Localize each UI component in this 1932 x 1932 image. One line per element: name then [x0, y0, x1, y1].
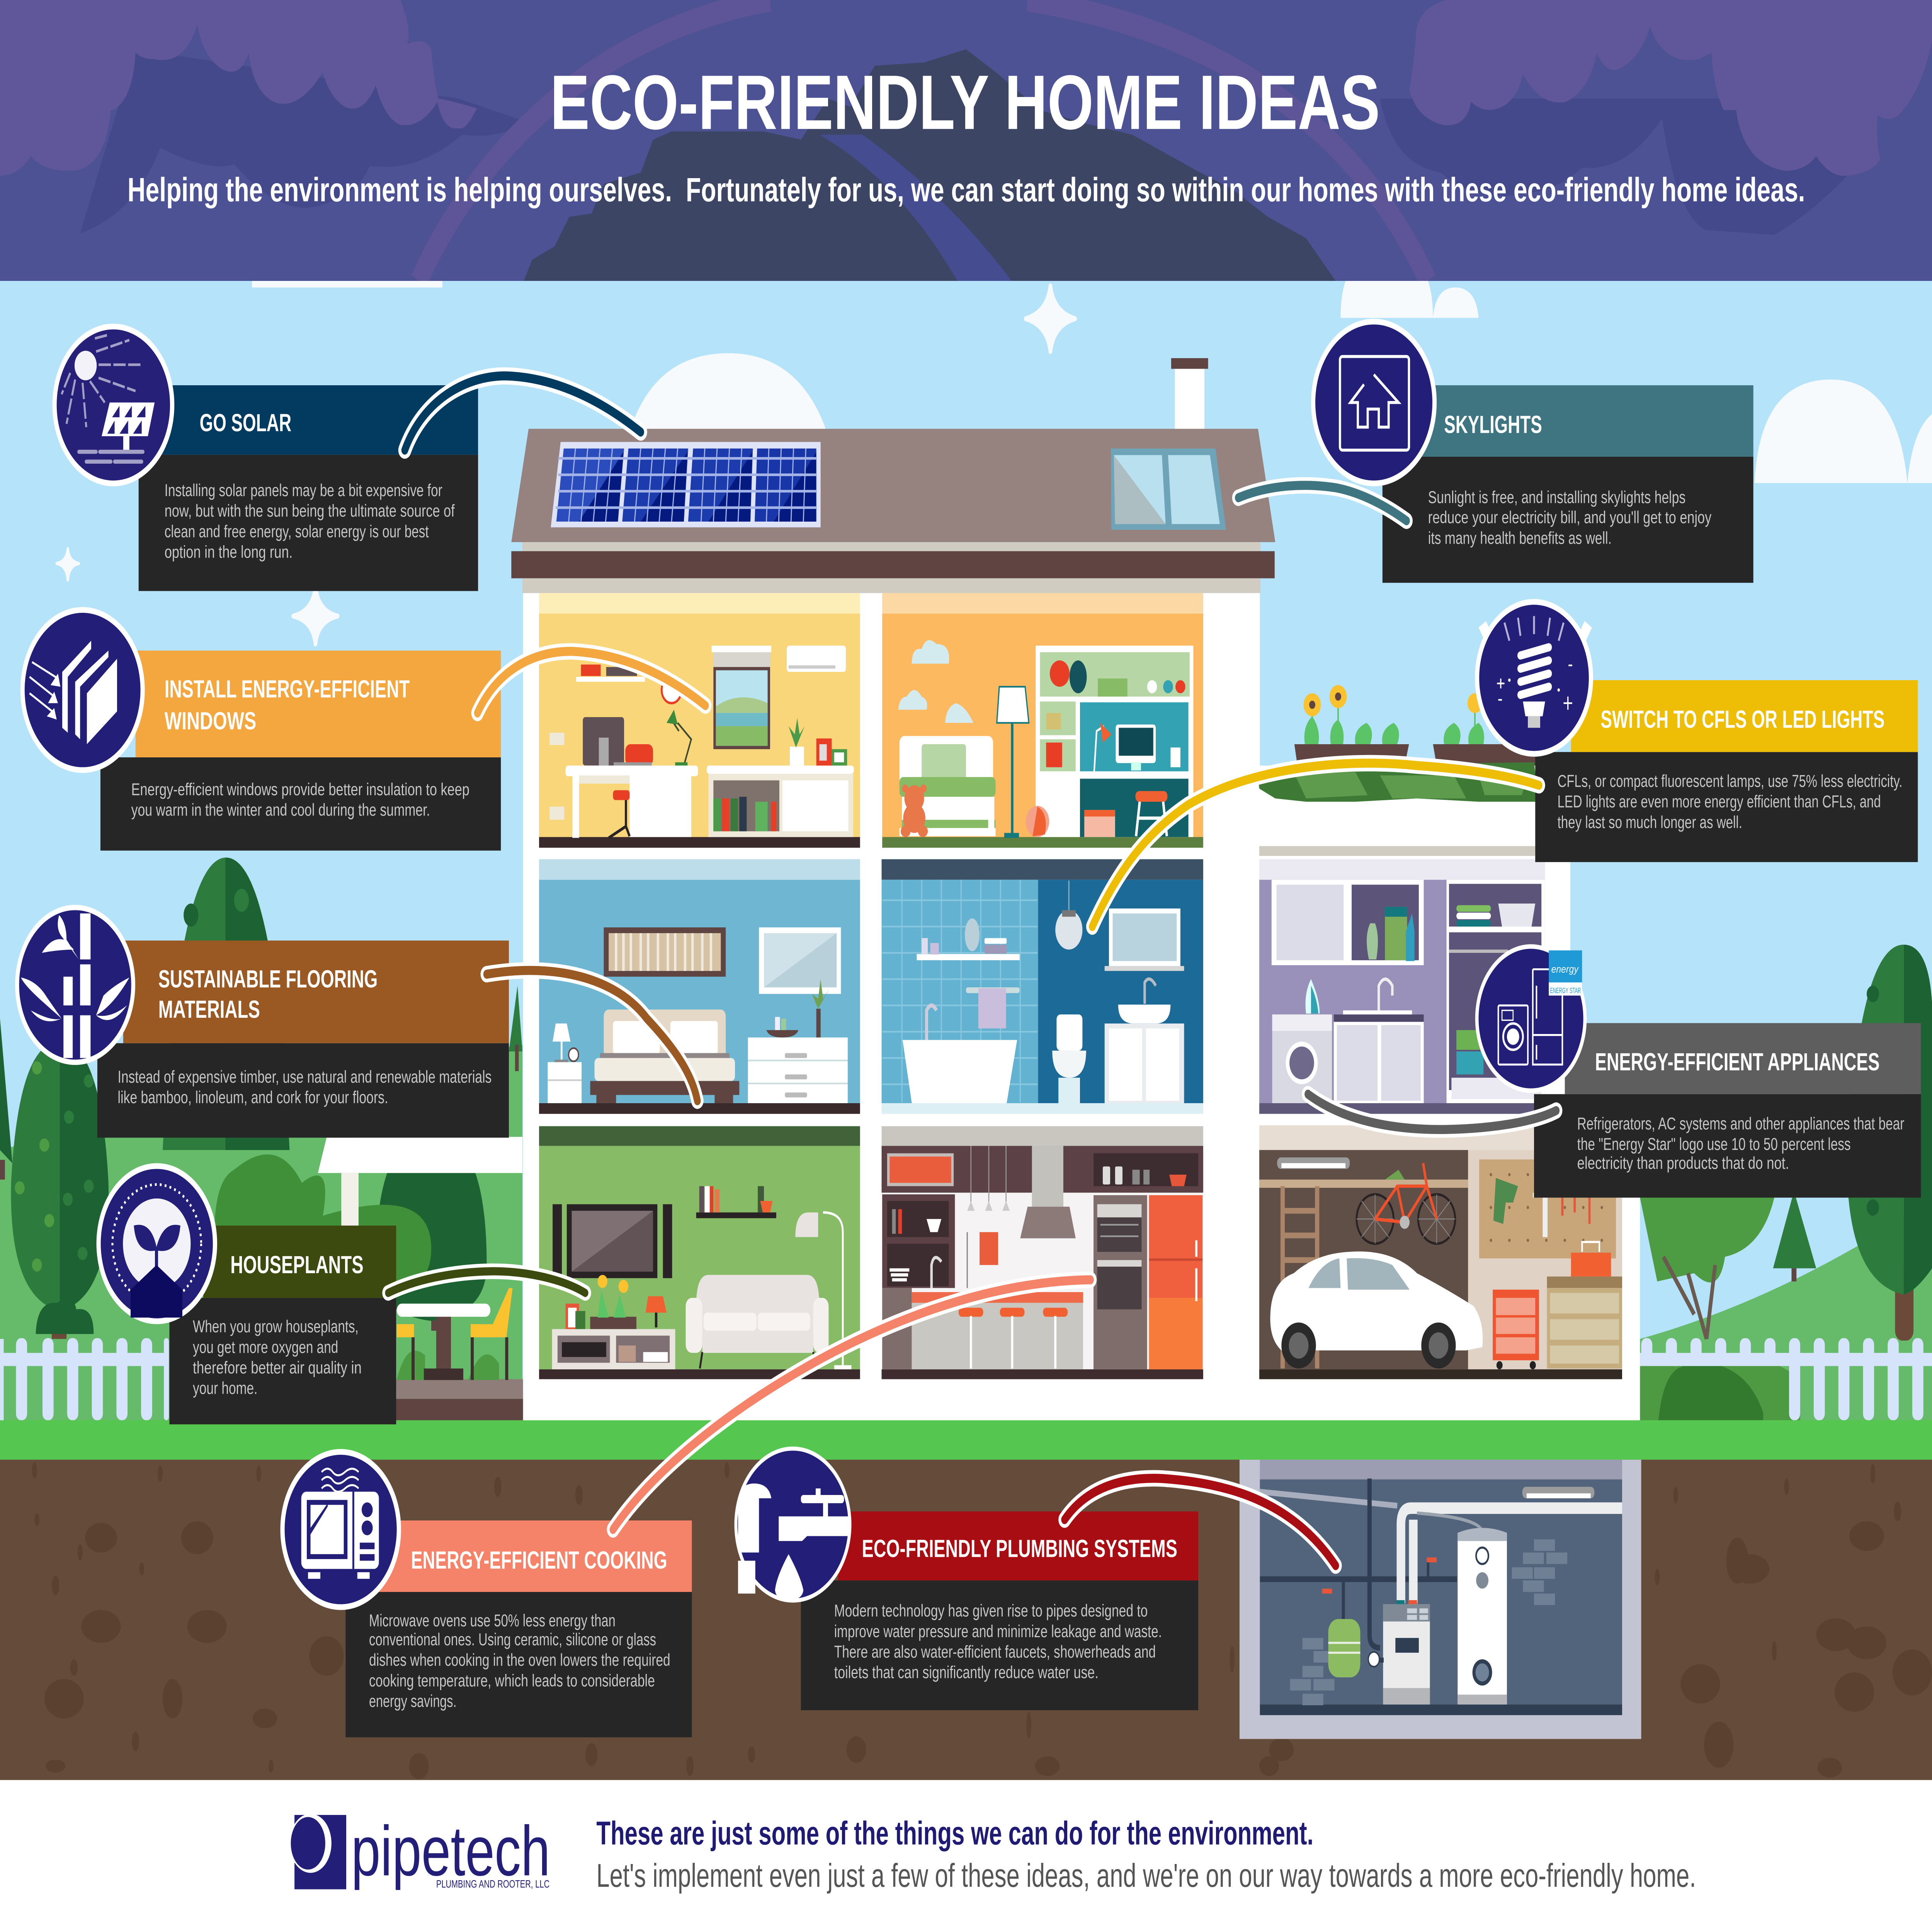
icon: cfl bulb: [1475, 599, 1593, 757]
heading: flooring: [158, 965, 378, 1023]
footer statement: These are just some of the things we can do for the environment.: [596, 1815, 1313, 1852]
arrow: appliances connector: [1308, 1094, 1556, 1129]
arrow: flooring connector: [487, 970, 697, 1101]
arrow: cooking connector: [613, 1280, 1090, 1529]
panel: energy-efficient windows: [20, 607, 501, 850]
heading: plumbing: ECO-FRIENDLY PLUMBING SYSTEMS: [862, 1535, 1177, 1562]
body: windows: you warm in the winter and cool during the summer.: [131, 801, 430, 820]
body: skylights: reduce your electricity bill, and you'll get to enjoy: [1428, 509, 1712, 527]
body: houseplants: your home.: [193, 1379, 257, 1398]
body: cooking: [369, 1612, 670, 1711]
room: bedroom: [539, 859, 860, 1114]
left landscape: [0, 857, 524, 1421]
subtitle: Helping the environment is helping ourselves. Fortunately for us, we can start doing so within our homes with these eco-friendly home ideas.: [128, 171, 1805, 209]
body: cooking: cooking temperature, which leads to considerable: [369, 1672, 655, 1690]
heading: flooring: SUSTAINABLE FLOORING: [158, 965, 378, 993]
heading: skylights: SKYLIGHTS: [1444, 411, 1542, 438]
panel: cfl or led lights: [1475, 599, 1918, 862]
icon: washer and fridge: energy: [1551, 964, 1579, 975]
body: cooking: conventional ones. Using ceramic, silicone or glass: [369, 1631, 656, 1649]
header banner: [0, 0, 1932, 281]
body: houseplants: [193, 1318, 362, 1398]
basement: [1240, 1460, 1641, 1739]
room: laundry: [1259, 859, 1545, 1114]
body: houseplants: When you grow houseplants,: [193, 1318, 359, 1336]
panel: skylights: [1311, 319, 1753, 583]
body: skylights: Sunlight is free, and installing skylights helps: [1428, 488, 1685, 507]
body: go solar: now, but with the sun being the ultimate source of: [165, 502, 455, 520]
body: go solar: clean and free energy, solar energy is our best: [165, 522, 429, 541]
body: houseplants: therefore better air quality in: [193, 1359, 362, 1378]
arrow: solar connector: [405, 376, 641, 450]
body: appliances: the "Energy Star" logo use 10 to 50 percent less: [1577, 1135, 1851, 1154]
heading: appliances: ENERGY-EFFICIENT APPLIANCES: [1595, 1048, 1879, 1076]
heading: windows: WINDOWS: [165, 707, 256, 735]
heading: go solar: GO SOLAR: [200, 409, 291, 437]
heading: windows: INSTALL ENERGY-EFFICIENT: [165, 675, 410, 702]
solar panels: [551, 442, 821, 527]
house body: [523, 593, 1640, 1420]
body: plumbing: Modern technology has given rise to pipes designed to: [834, 1602, 1148, 1621]
panel: sustainable flooring: [15, 905, 509, 1138]
room: study: [539, 593, 860, 848]
footer statement: [596, 1815, 1696, 1894]
icon: faucet and pipes: [735, 1447, 851, 1603]
body: windows: Energy-efficient windows provide better insulation to keep: [131, 780, 469, 799]
heading: houseplants: HOUSEPLANTS: [230, 1251, 364, 1279]
room: bathroom: [882, 859, 1203, 1114]
icon: seedling: [97, 1163, 217, 1324]
panel: plumbing systems: [735, 1447, 1198, 1710]
room: kids bedroom: [882, 593, 1203, 848]
body: cooking: Microwave ovens use 50% less energy than: [369, 1612, 616, 1630]
title: ECO-FRIENDLY HOME IDEAS: [550, 60, 1380, 146]
clouds and stars: [57, 281, 1932, 644]
body: flooring: [118, 1068, 492, 1107]
panel: houseplants: [97, 1163, 396, 1424]
roof: [511, 429, 1275, 593]
panel: energy-efficient appliances: [1475, 938, 1921, 1197]
heading: cfl: SWITCH TO CFLS OR LED LIGHTS: [1600, 706, 1884, 733]
body: cfl: [1558, 772, 1902, 832]
heading: flooring: MATERIALS: [158, 995, 260, 1023]
arrow: windows connector: [478, 651, 706, 713]
rooftop garden: [1258, 685, 1540, 802]
body: go solar: option in the long run.: [165, 543, 293, 562]
body: appliances: Refrigerators, AC systems and other appliances that bear: [1577, 1115, 1904, 1133]
footer statement: Let's implement even just a few of these ideas, and we're on our way towards a more eco-friendly home.: [596, 1857, 1696, 1894]
heading: windows: [165, 675, 410, 735]
heading: cooking: ENERGY-EFFICIENT COOKING: [411, 1546, 667, 1574]
arrow: houseplants connector: [388, 1271, 585, 1293]
body: go solar: Installing solar panels may be a bit expensive for: [165, 481, 442, 500]
body: plumbing: improve water pressure and minimize leakage and waste.: [834, 1622, 1162, 1641]
arrow: cfl connector: [1092, 763, 1539, 927]
fence left: [0, 1338, 169, 1421]
ground: grass and soil: [0, 1420, 1932, 1780]
body: skylights: [1428, 488, 1712, 548]
logo: pipetech: PLUMBING AND ROOTER, LLC: [436, 1878, 549, 1890]
body: cooking: energy savings.: [369, 1692, 456, 1711]
icon: washer and fridge: ENERGY STAR: [1550, 986, 1581, 995]
icon: bamboo: [15, 905, 135, 1065]
body: windows: [131, 780, 469, 820]
body: cooking: dishes when cooking in the oven lowers the required: [369, 1651, 670, 1670]
body: plumbing: [834, 1602, 1162, 1682]
body: skylights: its many health benefits as well.: [1428, 529, 1612, 548]
icon: microwave: [280, 1449, 401, 1610]
right landscape: [1640, 945, 1932, 1421]
chimney: [1171, 358, 1208, 430]
body: houseplants: you get more oxygen and: [193, 1338, 338, 1357]
icon: window panes: [20, 607, 145, 773]
body: appliances: [1577, 1115, 1904, 1173]
body: cfl: LED lights are even more energy efficient than CFLs, and: [1558, 793, 1881, 811]
body: flooring: like bamboo, linoleum, and cork for your floors.: [118, 1088, 388, 1107]
room: kitchen: [882, 1126, 1203, 1379]
sky background: [0, 281, 1932, 1431]
body: appliances: electricity than products that do not.: [1577, 1154, 1789, 1173]
icon: washer and fridge: [1475, 938, 1587, 1093]
icon: sun and solar panel: [53, 324, 174, 486]
panel: energy-efficient cooking: [280, 1449, 692, 1737]
arrow: plumbing connector: [1065, 1478, 1336, 1566]
body: go solar: [165, 481, 455, 562]
room: living room: [539, 1126, 860, 1379]
body: plumbing: There are also water-efficient faucets, showerheads and: [834, 1643, 1156, 1662]
body: flooring: Instead of expensive timber, use natural and renewable materials: [118, 1068, 492, 1087]
skylights: [1111, 449, 1226, 530]
body: cfl: they last so much longer as well.: [1558, 813, 1742, 832]
panel: go solar: [53, 324, 478, 591]
fence right: [1640, 1338, 1932, 1420]
body: cfl: CFLs, or compact fluorescent lamps, use 75% less electricity.: [1558, 772, 1902, 791]
logo: pipetech: pipetech: [351, 1812, 550, 1891]
arrow: skylights connector: [1238, 485, 1406, 521]
icon: house in skylight: [1311, 319, 1437, 486]
room: garage: [1259, 1125, 1622, 1379]
body: plumbing: toilets that can significantly reduce water use.: [834, 1663, 1099, 1682]
